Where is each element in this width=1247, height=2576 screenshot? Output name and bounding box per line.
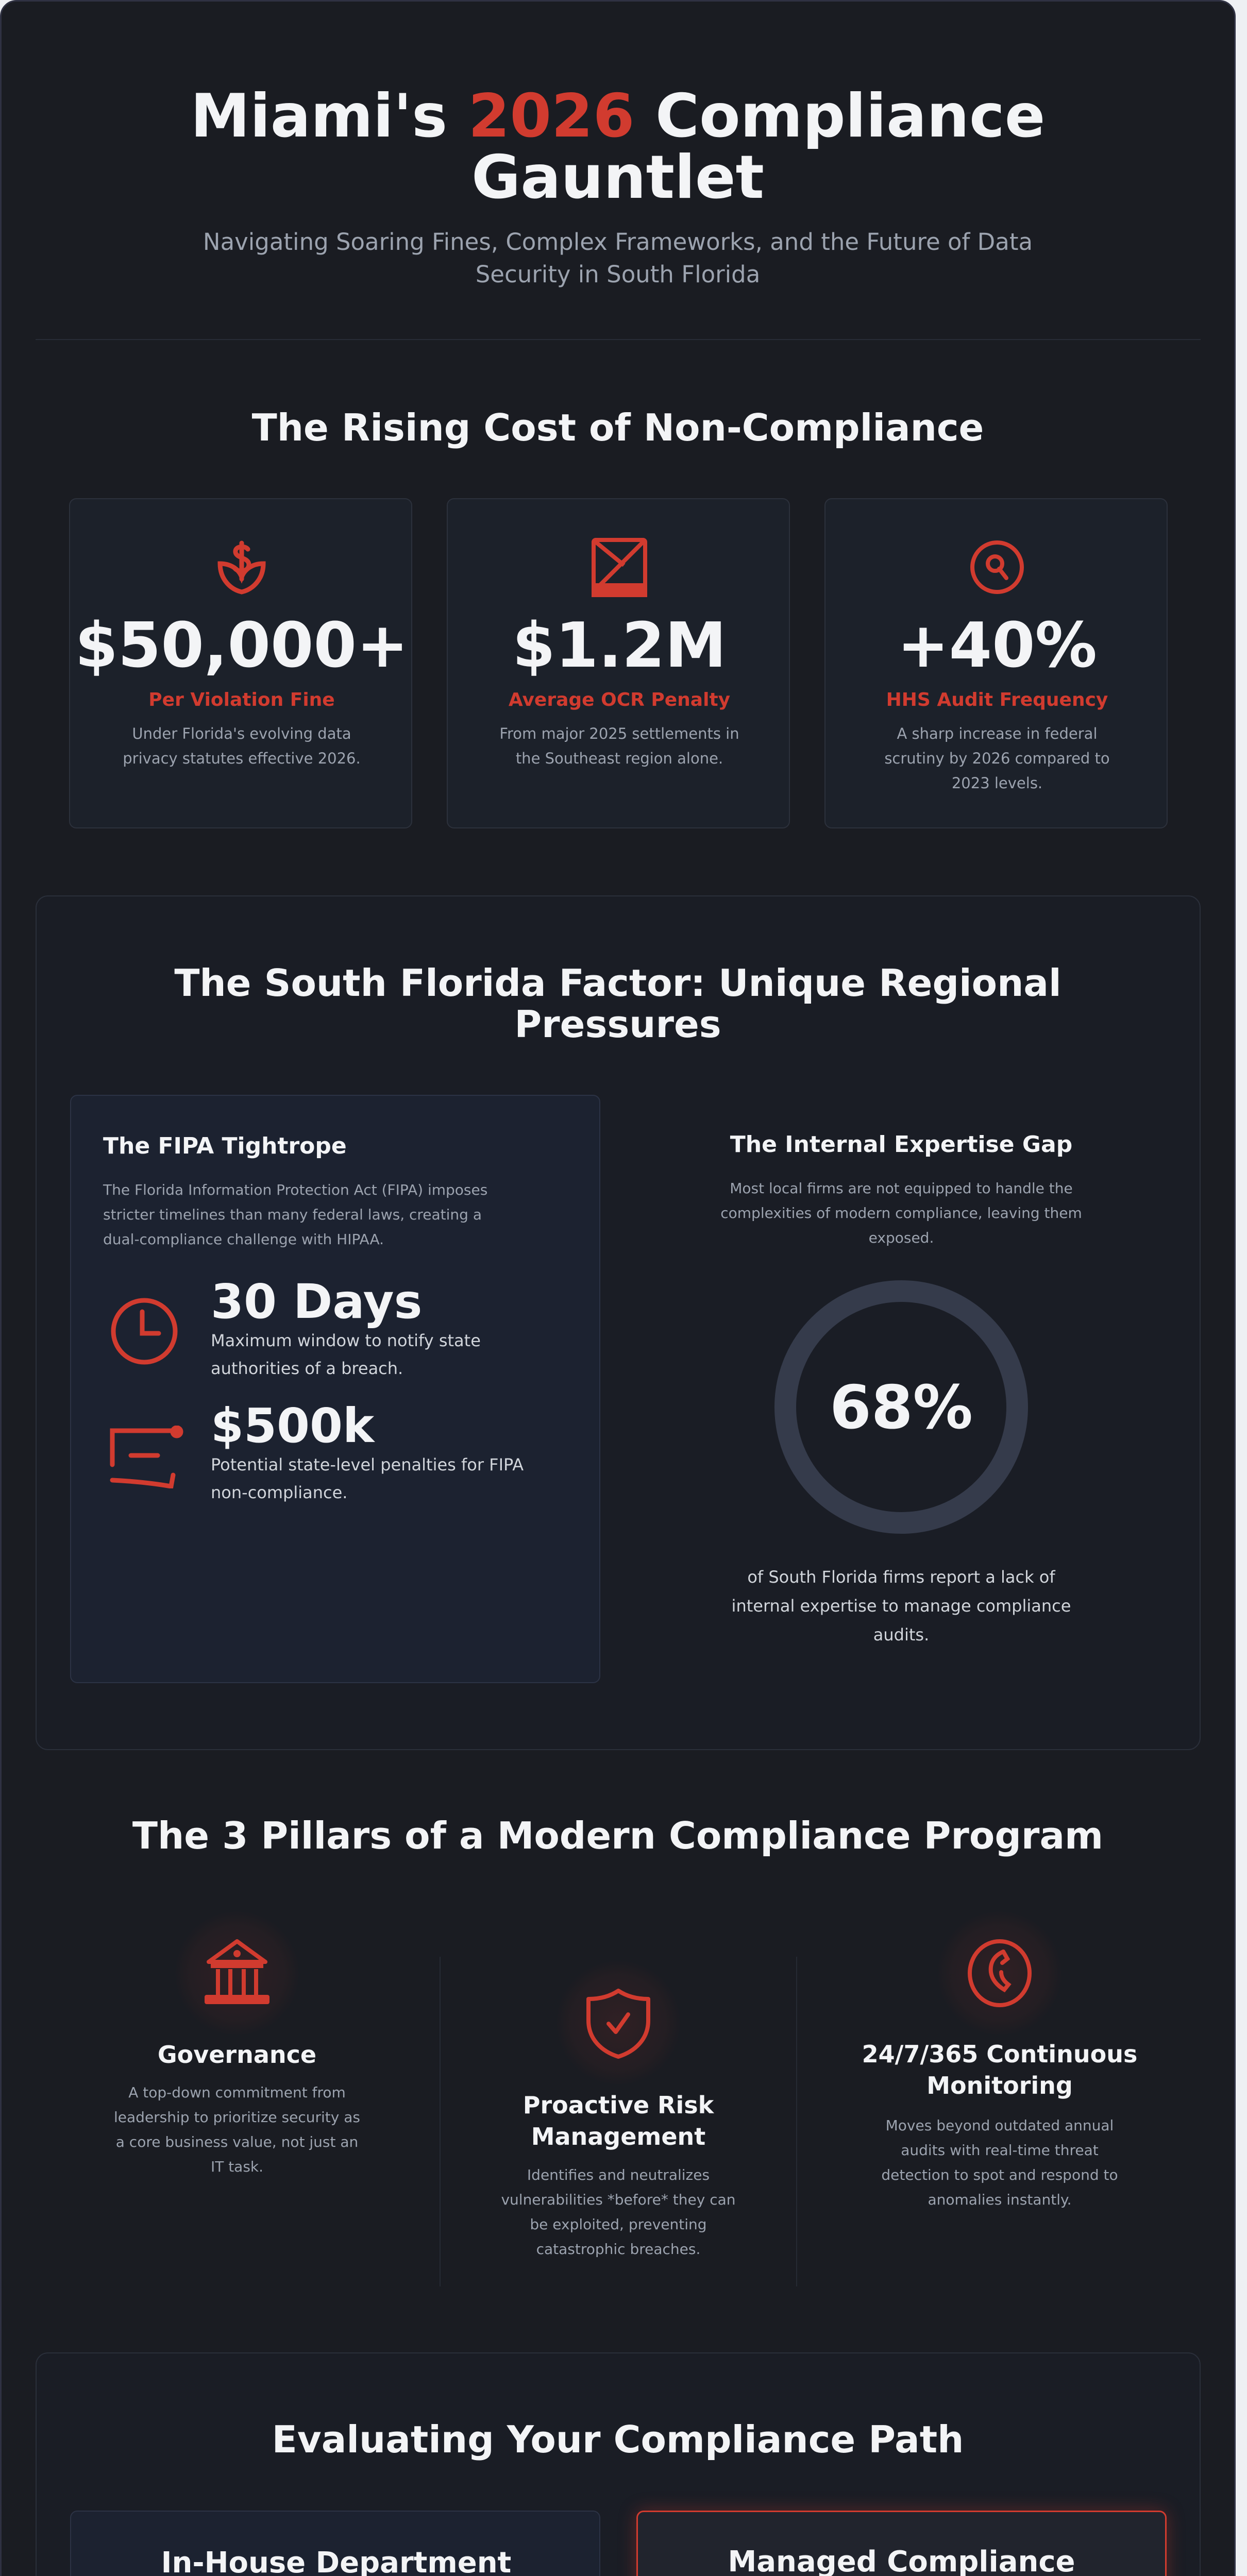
description: stricter timelines than many federal laws, creating a <box>103 1206 482 1223</box>
heading: south florida: The South Florida Factor: Unique Regional <box>174 961 1061 1005</box>
icon: monitoring <box>938 1911 1061 2035</box>
card: FIPA tightrope <box>70 1095 600 1683</box>
stat card 1 <box>69 498 412 828</box>
description: the Southeast region alone. <box>516 750 723 767</box>
stat: $500k: $500k <box>211 1398 374 1453</box>
description: anomalies instantly. <box>928 2191 1071 2208</box>
heading: south florida: Pressures <box>514 1003 721 1046</box>
card: in-house <box>70 2511 600 2576</box>
description <box>720 1180 1082 1246</box>
stat: $50,000+: $50,000+ <box>75 610 409 682</box>
subtitle: Navigating Soaring Fines, Complex Frameworks, and the Future of Data <box>203 228 1033 256</box>
ring caption: of South Florida firms report a lack of <box>747 1567 1055 1587</box>
pillar: monitoring <box>845 1911 1154 2246</box>
title <box>845 2039 1154 2102</box>
label: Average OCR Penalty <box>509 689 730 710</box>
icon: money leaf <box>217 541 266 595</box>
description <box>211 1331 481 1378</box>
description <box>845 2113 1154 2212</box>
title: Governance <box>158 2041 316 2069</box>
description: audits with real-time threat <box>901 2142 1099 2159</box>
title: Gauntlet <box>471 143 764 212</box>
description <box>103 1181 487 1248</box>
title <box>523 2091 714 2150</box>
stat: $1.2M: $1.2M <box>512 610 727 682</box>
subtitle <box>203 228 1033 288</box>
description: a core business value, not just an <box>116 2133 358 2150</box>
description: Identifies and neutralizes <box>527 2166 710 2183</box>
stat card 2 <box>447 498 790 828</box>
stat: 68%: 68% <box>830 1373 973 1443</box>
icon: building <box>175 1911 299 2035</box>
ring caption: audits. <box>873 1625 929 1645</box>
heading: evaluating path: Evaluating Your Compliance Path <box>272 2418 964 2461</box>
heading: 3 pillars: The 3 Pillars of a Modern Compliance Program <box>132 1814 1103 1857</box>
description: A top-down commitment from <box>128 2084 346 2101</box>
title: Proactive Risk <box>523 2091 714 2119</box>
card: managed partner <box>636 2511 1167 2576</box>
icon: clock <box>111 1298 177 1364</box>
description: dual-compliance challenge with HIPAA. <box>103 1231 384 1248</box>
pillar: governance <box>114 1923 360 2175</box>
description: Under Florida's evolving data <box>132 725 351 742</box>
panel: compliance path <box>36 2352 1201 2576</box>
description: catastrophic breaches. <box>536 2241 700 2258</box>
label: HHS Audit Frequency <box>886 689 1108 710</box>
panel: south florida factor <box>36 895 1201 1750</box>
icon: shield <box>557 1961 680 2084</box>
heading: rising cost: The Rising Cost of Non-Compliance <box>252 406 984 449</box>
description: Potential state-level penalties for FIPA <box>211 1455 524 1475</box>
subtitle: Security in South Florida <box>476 261 760 288</box>
description <box>501 2166 736 2258</box>
description: 2023 levels. <box>952 774 1042 792</box>
description: From major 2025 settlements in <box>499 725 739 742</box>
description <box>123 725 361 767</box>
description: privacy statutes effective 2026. <box>123 750 361 767</box>
description <box>114 2084 360 2175</box>
icon: audit search <box>970 540 1024 594</box>
description: vulnerabilities *before* they can <box>501 2191 736 2208</box>
title: 24/7/365 Continuous <box>862 2040 1137 2068</box>
stat card 3 <box>824 498 1168 828</box>
ring caption <box>732 1567 1071 1645</box>
label: Per Violation Fine <box>148 689 335 710</box>
heading: The FIPA Tightrope <box>103 1133 347 1159</box>
description <box>499 725 739 767</box>
description: exposed. <box>869 1229 934 1246</box>
description <box>884 725 1110 792</box>
title: Monitoring <box>926 2072 1073 2099</box>
description: detection to spot and respond to <box>881 2166 1118 2183</box>
stat: +40%: +40% <box>897 610 1097 682</box>
description: be exploited, preventing <box>530 2216 707 2233</box>
stat: 30 days: 30 Days <box>211 1274 422 1329</box>
description: authorities of a breach. <box>211 1359 403 1378</box>
description: scrutiny by 2026 compared to <box>884 750 1110 767</box>
description: A sharp increase in federal <box>897 725 1098 742</box>
heading: internal expertise gap: The Internal Expertise Gap <box>730 1131 1072 1158</box>
title <box>191 81 1045 212</box>
ring caption: internal expertise to manage compliance <box>732 1596 1071 1616</box>
pillar: proactive risk <box>501 1973 736 2258</box>
icon: penalty document <box>110 1426 183 1488</box>
description: leadership to prioritize security as <box>114 2109 360 2126</box>
heading: south florida <box>174 961 1061 1046</box>
chart: 68% ring <box>774 1280 1028 1534</box>
description: complexities of modern compliance, leaving them <box>720 1205 1082 1222</box>
description: Maximum window to notify state <box>211 1331 481 1350</box>
description: non-compliance. <box>211 1483 347 1502</box>
description: Moves beyond outdated annual <box>886 2117 1114 2134</box>
description: Most local firms are not equipped to handle the <box>730 1180 1073 1197</box>
description: IT task. <box>211 2158 263 2175</box>
icon: document <box>592 538 647 597</box>
description: The Florida Information Protection Act (FIPA) imposes <box>103 1181 487 1198</box>
title: Miami's 2026 Compliance <box>191 81 1045 151</box>
description <box>211 1455 524 1502</box>
title: Management <box>531 2123 705 2150</box>
